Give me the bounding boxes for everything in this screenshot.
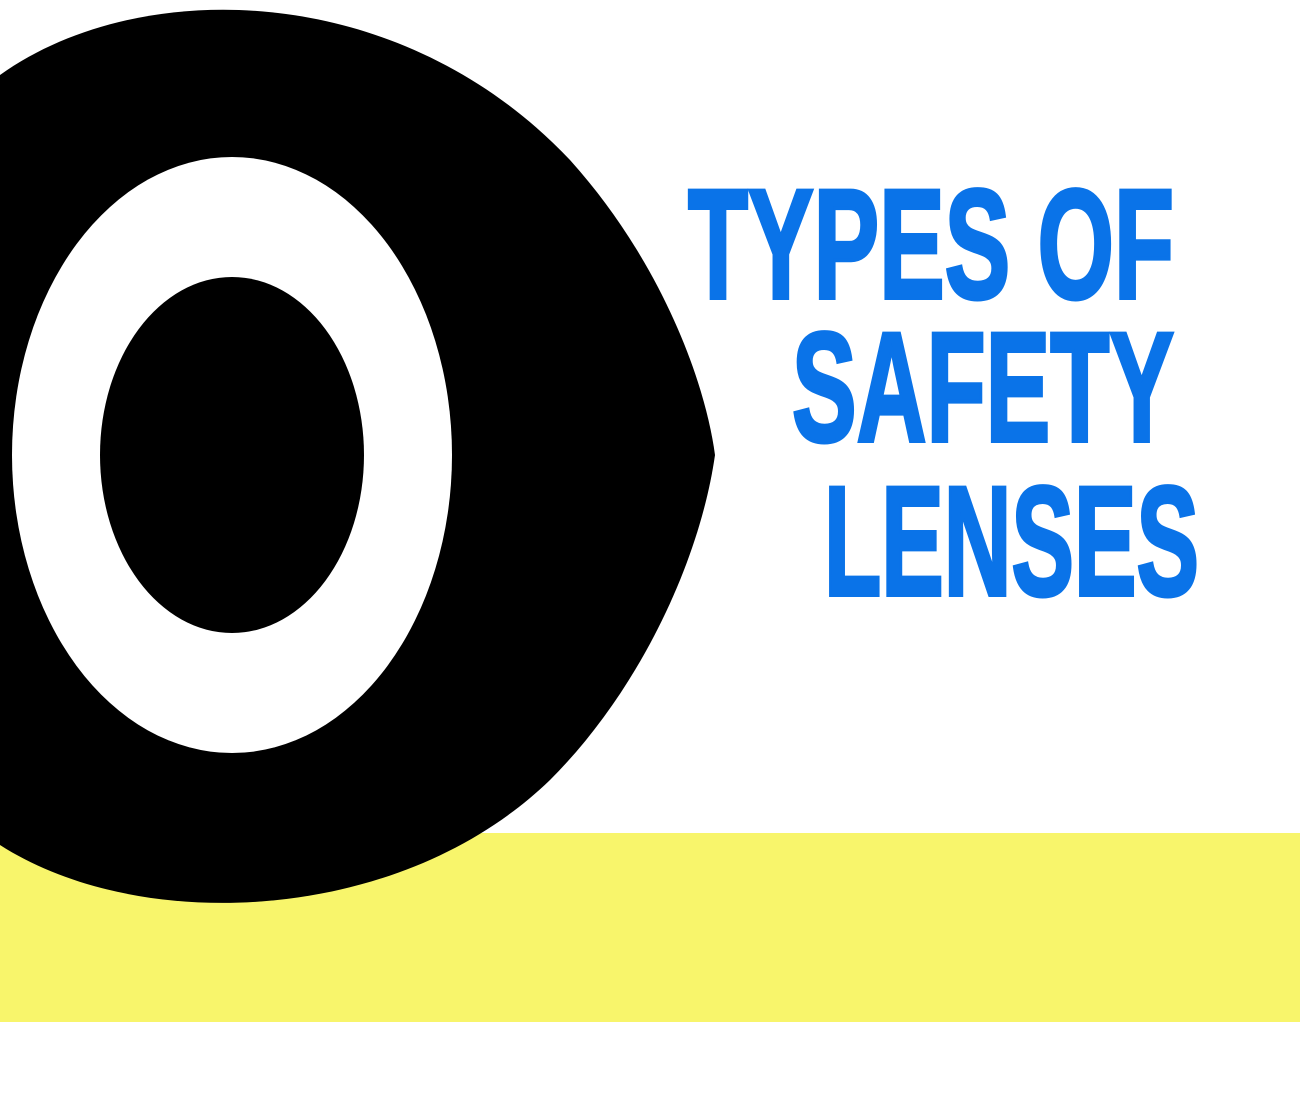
yellow band <box>0 833 1300 1022</box>
icon: eye <box>0 10 715 903</box>
title <box>688 158 1199 629</box>
